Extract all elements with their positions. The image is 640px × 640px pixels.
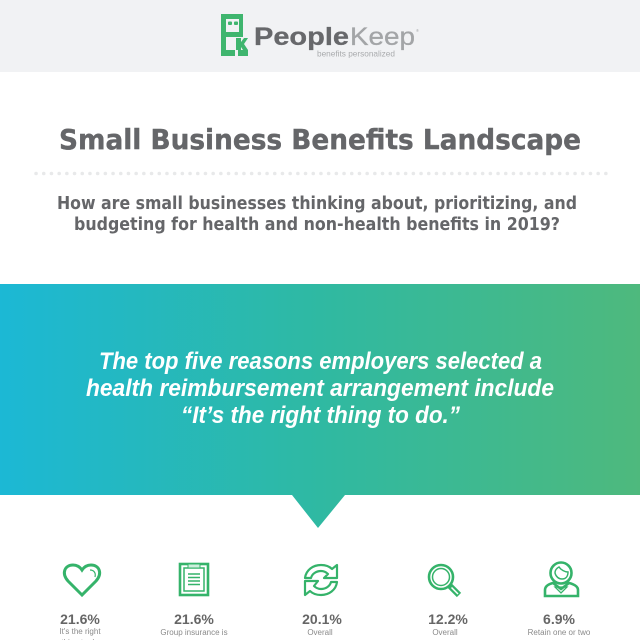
- stat 5: [528, 611, 591, 640]
- stat 2: Group insurance is: [160, 628, 228, 637]
- subtitle: budgeting for health and non-health benefits in 2019?: [74, 215, 560, 235]
- stat 4: [428, 611, 468, 640]
- logo tagline: benefits personalized: [317, 48, 395, 58]
- stat 4: 12.2%: [428, 611, 468, 627]
- gradient banner with pointer: [0, 284, 640, 528]
- stat 3: [298, 611, 342, 640]
- banner text: “It’s the right thing to do.”: [181, 402, 460, 429]
- icon: refresh arrows: [305, 565, 337, 595]
- stat 2: [160, 611, 228, 640]
- stat 2: 21.6%: [174, 611, 214, 627]
- icon: clipboard: [180, 564, 208, 595]
- stat 4: Overall: [432, 628, 458, 637]
- banner text: health reimbursement arrangement include: [86, 375, 554, 402]
- stat 5: Retain one or two: [528, 628, 591, 637]
- banner text: The top five reasons employers selected a: [99, 348, 542, 375]
- logo wordmark: People: [254, 23, 349, 51]
- header band with logo: [0, 0, 640, 72]
- icon: PeopleKeep logo mark: [221, 14, 248, 56]
- stat 1: It's the right: [59, 627, 101, 636]
- stat 3: 20.1%: [302, 611, 342, 627]
- icon: heart: [64, 565, 100, 595]
- logo wordmark: ®: [416, 28, 419, 33]
- icon: person: [545, 562, 578, 596]
- banner text: [86, 348, 554, 429]
- subtitle: How are small businesses thinking about, prioritizing, and: [57, 194, 577, 214]
- stat 1: 21.6%: [60, 611, 100, 627]
- stat 3: Overall: [307, 628, 333, 637]
- icon: magnifying glass: [429, 565, 459, 595]
- logo wordmark: [254, 23, 419, 51]
- stat 1: [59, 611, 101, 640]
- stat 5: 6.9%: [543, 611, 576, 627]
- subtitle: [57, 194, 577, 235]
- title: Small Business Benefits Landscape: [59, 123, 581, 156]
- logo wordmark: Keep: [350, 23, 415, 51]
